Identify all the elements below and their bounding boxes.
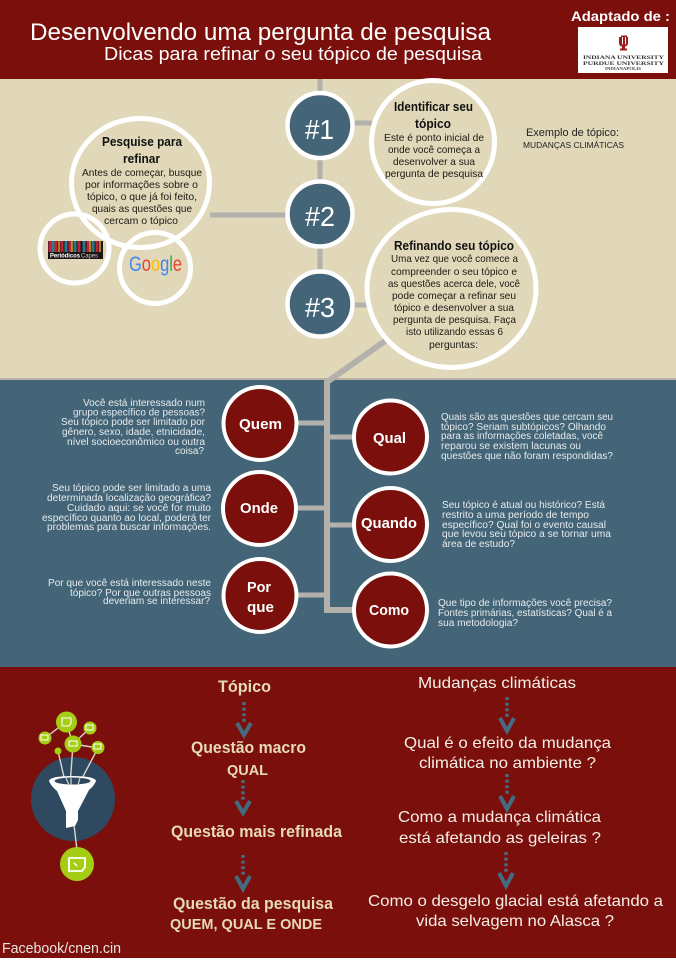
text block: tópico e desenvolver a sua <box>394 302 514 314</box>
text block: compreender o seu tópico e <box>391 266 517 278</box>
text block <box>82 167 202 227</box>
heading: Identificar seu <box>394 100 473 114</box>
logo: Indiana University Purdue University <box>578 27 668 73</box>
text block: Onde <box>42 483 212 533</box>
text block: Como: Fontes primárias, estatísticas? Qual é a <box>438 608 612 619</box>
subtitle: Dicas para refinar o seu tópico de pesquisa <box>104 43 483 64</box>
text block: Quando: Seu tópico é atual ou histórico? Está <box>442 500 605 511</box>
text block: Quando: que levou seu tópico a se tornar uma <box>442 529 611 540</box>
text block: Este é ponto inicial de <box>384 132 484 144</box>
panel: seis perguntas <box>0 341 676 667</box>
text block: Quem: Você está interessado num <box>83 398 205 409</box>
arrow <box>236 780 250 813</box>
icon: step 2 <box>288 182 352 246</box>
title: Desenvolvendo uma pergunta de pesquisa <box>30 19 492 46</box>
text block: questão macro exemplo: climática no ambiente ? <box>419 755 596 772</box>
text block: Qual: Quais são as questões que cercam seu <box>441 412 613 423</box>
icon: Quando <box>354 488 427 561</box>
text block <box>384 132 484 180</box>
text block: Quando: área de estudo? <box>442 539 515 550</box>
arrow <box>500 697 514 731</box>
icon: Qual: Qual <box>373 430 406 447</box>
arrow <box>499 852 513 886</box>
text block: Qual: para as informações coletadas, você <box>441 431 603 442</box>
icon: Periódicos Capes <box>40 214 109 283</box>
text block: Quem: Seu tópico pode ser limitado por <box>61 417 206 428</box>
text block: questão macro exemplo: Qual é o efeito da mudança <box>404 735 611 752</box>
icon: Onde <box>223 472 296 545</box>
text block: Onde: determinada localização geográfica? <box>47 493 211 504</box>
logo: Indiana University Purdue University: INDIANA UNIVERSITY <box>583 55 664 61</box>
icon: step 2: #2 <box>305 201 335 232</box>
text block: Quem <box>61 398 206 457</box>
arrow <box>500 774 514 809</box>
text block: questão da pesquisa exemplo: Como o desgelo glacial está afetando a <box>368 893 663 910</box>
text block: perguntas: <box>429 339 478 351</box>
text block: exemplo de tópico: Exemplo de tópico: <box>526 127 619 139</box>
text block: Antes de começar, busque <box>82 167 202 179</box>
text block: Questão da pesquisa <box>170 895 334 933</box>
text block: Quem: gênero, sexo, idade, etnicidade, <box>62 427 205 438</box>
text block: tópico, o que já foi feito, <box>87 191 197 203</box>
connector lines <box>297 341 385 610</box>
text block: Onde: específico quanto ao local, poderá ter <box>42 513 212 524</box>
icon: step 1 <box>288 93 352 158</box>
icon: Periódicos Capes: Periódicos <box>50 254 81 260</box>
credit label: Adaptado de : <box>571 8 670 24</box>
text block: questão macro exemplo <box>404 735 611 772</box>
text block: Por que: tópico? Por que outras pessoas <box>70 588 211 599</box>
text block: por informações sobre o <box>85 179 198 191</box>
panel: pesquise para refinar: refinar <box>123 152 160 166</box>
text block: Onde: problemas para buscar informações. <box>47 522 211 533</box>
icon: Como <box>354 574 427 646</box>
text block: Onde: Cuidado aqui: se você for muito <box>67 503 211 514</box>
text block: Questão da pesquisa: QUEM, QUAL E ONDE <box>170 916 322 933</box>
text block: Por que <box>48 578 211 607</box>
text block: Qual: questões que não foram respondidas? <box>441 451 613 462</box>
text block: cercam o tópico <box>104 215 178 227</box>
icon: step 3: #3 <box>305 292 335 323</box>
text block: questão da pesquisa exemplo <box>368 893 663 930</box>
text block: Questão macro: Questão macro <box>191 739 306 757</box>
text block: Tópico: Tópico <box>218 678 271 696</box>
panel: refinando seu tópico <box>367 210 536 368</box>
panel: exemplo de funil <box>0 667 676 958</box>
text block: Questão mais refinada: Questão mais refinada <box>171 823 343 841</box>
text block: onde você começa a <box>388 144 480 156</box>
text block: questão refinada exemplo: Como a mudança climática <box>398 809 601 826</box>
heading: Refinando seu tópico <box>394 239 514 253</box>
text block: Quando: restrito a uma período de tempo <box>442 510 589 521</box>
icon: Como: Como <box>369 602 409 619</box>
text block: exemplo de tópico <box>523 127 624 150</box>
text block: Mudanças climáticas: Mudanças climáticas <box>418 675 576 692</box>
icon: Por que: Por <box>247 579 271 596</box>
text block: Questão da pesquisa: Questão da pesquisa <box>173 895 334 913</box>
icon: Qual <box>354 400 427 474</box>
text block: pergunta de pesquisa <box>385 168 483 180</box>
text block: Quando: específico? Qual foi o evento causal <box>442 520 606 531</box>
text block: Questão macro <box>191 739 306 779</box>
text block: Onde: Seu tópico pode ser limitado a uma <box>52 483 211 494</box>
text block: Por que: Por que você está interessado neste <box>48 578 211 589</box>
text block: Quem: nível socioeconômico ou outra <box>67 437 205 448</box>
text block: desenvolver a sua <box>393 156 475 168</box>
text block <box>388 253 520 351</box>
heading: Pesquise para <box>102 135 183 149</box>
panel: identificar seu tópico: tópico <box>415 117 451 131</box>
icon: Por que: que <box>247 599 274 616</box>
panel: pesquise para refinar <box>72 118 210 248</box>
icon: step 1: #1 <box>305 114 334 145</box>
icon: Por que <box>224 559 296 632</box>
icon: Periódicos Capes: Capes <box>81 254 98 260</box>
text block: Como: sua metodologia? <box>438 618 518 629</box>
text block: questão refinada exemplo: está afetando as geleiras ? <box>399 830 601 847</box>
text block: credit: Facebook/cnen.cin <box>2 940 121 957</box>
arrow <box>236 855 250 889</box>
icon: Quem: Quem <box>239 416 282 433</box>
text block: Uma vez que você comece a <box>391 253 518 265</box>
icon: Google <box>120 232 190 304</box>
logo: Indiana University Purdue University: PURDUE UNIVERSITY <box>583 61 664 67</box>
text block: isto utilizando essas 6 <box>406 326 503 338</box>
panel: steps <box>0 79 676 380</box>
icon: Quem <box>224 387 296 460</box>
text block: pergunta de pesquisa. Faça <box>393 314 516 326</box>
text block: Questão macro: QUAL <box>227 762 268 779</box>
panel: identificar seu tópico <box>372 80 494 204</box>
text block: exemplo de tópico: MUDANÇAS CLIMÁTICAS <box>523 141 624 150</box>
logo: Indiana University Purdue University: INDIANAPOLIS <box>605 67 641 71</box>
text block: Qual: tópico? Seriam subtópicos? Olhando <box>441 422 606 433</box>
text block: Qual: reparou se existem lacunas ou <box>441 441 581 452</box>
text block: Quando <box>442 500 611 550</box>
icon: Onde: Onde <box>240 500 278 517</box>
panel: header <box>0 0 676 79</box>
text block: pode começar a refinar seu <box>392 290 516 302</box>
icon: Google: Google <box>129 253 182 276</box>
text block: questão da pesquisa exemplo: vida selvagem no Alasca ? <box>416 913 614 930</box>
text block: Como: Que tipo de informações você precisa? <box>438 598 612 609</box>
text block: Quem: grupo específico de pessoas? <box>73 408 205 418</box>
text block: as questões acerca dele, você <box>388 278 520 290</box>
text block: Como <box>438 598 612 629</box>
text block: questão refinada exemplo <box>398 809 601 847</box>
text block: Por que: deveriam se interessar? <box>103 596 210 607</box>
text block: Quem: coisa? <box>175 446 204 457</box>
icon: funnel <box>31 712 115 881</box>
icon: Quando: Quando <box>361 515 417 532</box>
text block: Qual <box>441 412 613 462</box>
icon: step 3 <box>288 272 352 336</box>
arrow <box>237 702 251 735</box>
text block: quais as questões que <box>92 203 192 215</box>
